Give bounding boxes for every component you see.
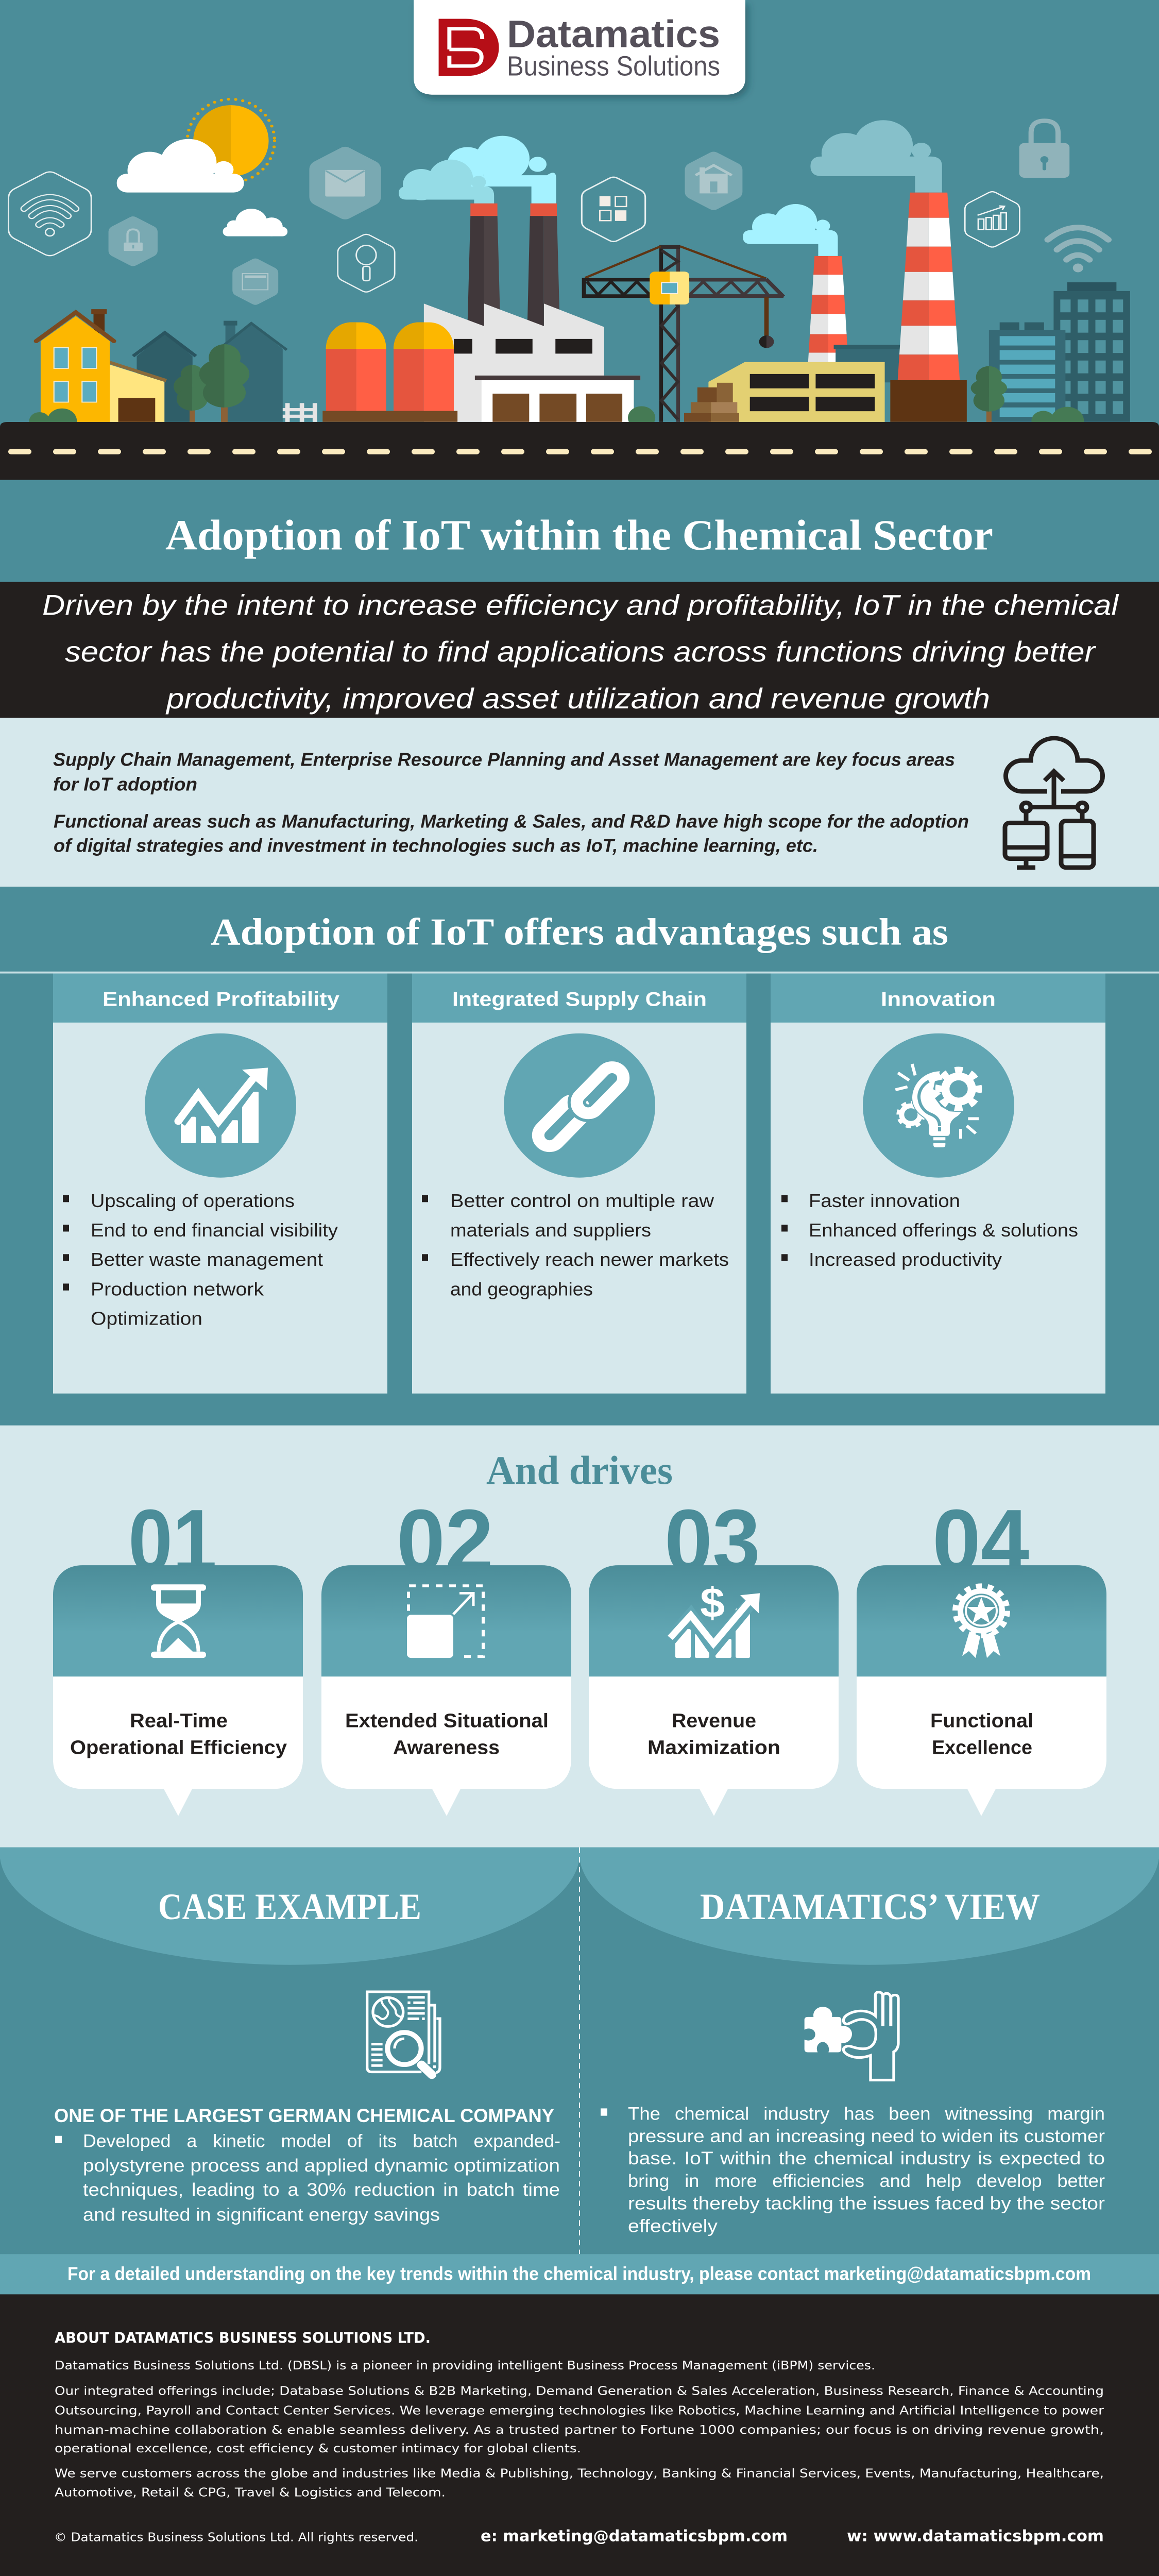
icon: growth chart [145, 1033, 296, 1178]
intro text: Driven by the intent to increase efficiency and profitability, IoT in the chemical [42, 590, 1119, 621]
numerals: 02 [397, 1490, 493, 1591]
yellow warehouse [708, 362, 885, 422]
card label [70, 1710, 287, 1759]
intro band [0, 582, 1159, 718]
bullet list: Better control on multiple raw [450, 1190, 714, 1211]
section heading: and drives: And drives [486, 1449, 673, 1493]
panel: integrated supply chain [412, 974, 746, 1394]
tower crane [584, 245, 783, 422]
card label [345, 1710, 549, 1759]
about text: Our integrated offerings include; Database Solutions & B2B Marketing, Demand Generation & Sales Acceleration, Business Research, Finance & Accounting [55, 2384, 1104, 2398]
chimneys: dark factory stacks [468, 216, 560, 326]
logo wordmark [507, 13, 720, 81]
front office building [989, 323, 1065, 422]
smoke: small striped chimney [743, 204, 838, 256]
numerals: 01 [128, 1490, 217, 1591]
icon: award rosette [957, 1587, 1006, 1658]
icon: revenue chart with dollar [670, 1579, 760, 1658]
intro text [42, 590, 1119, 715]
card label: Excellence [932, 1737, 1032, 1759]
icon: chain link [504, 1033, 655, 1178]
about text: Automotive, Retail & CPG, Travel & Logistics and Telecom. [55, 2485, 446, 2500]
card 03: revenue maximization [589, 1565, 839, 1816]
footer [0, 2294, 1159, 2576]
about text: Datamatics Business Solutions Ltd. (DBSL) is a pioneer in providing intelligent Business Process Management (iBPM) services. [55, 2359, 875, 2372]
logo card [414, 0, 745, 95]
case text: Developed a kinetic model of its batch expanded- [83, 2130, 560, 2151]
icon: expand square [407, 1586, 483, 1658]
icon: light bulb and gears [863, 1033, 1014, 1178]
about heading: ABOUT DATAMATICS BUSINESS SOLUTIONS LTD. [55, 2329, 431, 2346]
bullet list: Effectively reach newer markets [450, 1249, 729, 1270]
icon: house hexagon [685, 151, 742, 210]
icon: chart hexagon [965, 192, 1019, 247]
icon: window hexagon [232, 259, 278, 305]
card heading: Integrated Supply Chain [452, 988, 707, 1010]
view text [601, 2103, 1105, 2236]
about text: human-machine collaboration & enable seamless delivery. As a trusted partner to Fortune 1000 companies; our focus is on driving revenue growth, [55, 2422, 1104, 2437]
bullet list: Enhanced offerings & solutions [809, 1219, 1078, 1241]
card label: Awareness [393, 1737, 500, 1759]
card label: Real-Time [130, 1710, 228, 1732]
focus area text: Functional areas such as Manufacturing, Marketing & Sales, and R&D have high scope for the adoption [54, 811, 969, 832]
tree and bushes [628, 366, 1084, 435]
title: Adoption of IoT within the Chemical Sector [165, 511, 993, 559]
panel: datamatics view [601, 1886, 1105, 2236]
tall striped chimney [895, 193, 962, 380]
card 02: extended situational awareness [321, 1565, 571, 1816]
case text [55, 2130, 560, 2225]
view text: results thereby tackling the issues faced by the sector [628, 2193, 1105, 2213]
heading: case example: CASE EXAMPLE [158, 1886, 421, 1927]
icon: lock hexagon [109, 216, 158, 266]
icon: Datamatics DB mark [439, 19, 499, 76]
card label: Operational Efficiency [70, 1737, 287, 1759]
bullet list [422, 1190, 729, 1299]
card label: Revenue [672, 1710, 756, 1732]
bullet list: materials and suppliers [450, 1219, 651, 1241]
teal utility building [834, 345, 901, 382]
bullet list [63, 1190, 338, 1329]
case text: and resulted in significant energy savings [83, 2204, 440, 2225]
case text: polystyrene process and applied dynamic optimization [83, 2155, 560, 2176]
about text: Outsourcing, Payroll and Contact Center Services. We leverage emerging technologies like Robotics, Machine Learning and Artificial Intelligence to power [55, 2403, 1104, 2418]
numerals: 03 [664, 1490, 760, 1591]
focus area text: Supply Chain Management, Enterprise Resource Planning and Asset Management are key focus areas [53, 749, 955, 770]
bush [29, 409, 77, 433]
about text: We serve customers across the globe and industries like Media & Publishing, Technology, Banking & Financial Services, Events, Manufacturing, Healthcare, [55, 2466, 1104, 2480]
numerals [128, 1490, 1029, 1591]
view text: effectively [628, 2215, 718, 2236]
intro text: productivity, improved asset utilization and revenue growth [165, 683, 990, 715]
card heading: Enhanced Profitability [103, 988, 340, 1010]
card label: Extended Situational [345, 1710, 549, 1732]
bullet list: Better waste management [91, 1249, 323, 1270]
section heading: advantages: Adoption of IoT offers advantages such as [211, 911, 948, 953]
factory building [424, 303, 640, 422]
icon: hourglass [151, 1584, 206, 1658]
chimney caps [470, 204, 557, 216]
view text: bring in more efficiencies and help develop better [628, 2171, 1105, 2191]
icon: mail hexagon [309, 147, 381, 219]
teal background houses [133, 321, 287, 422]
contact website: w: www.datamaticsbpm.com [847, 2527, 1104, 2545]
bullet list: Optimization [91, 1308, 202, 1329]
copyright: © Datamatics Business Solutions Ltd. All rights reserved. [54, 2530, 418, 2544]
fence [283, 403, 317, 422]
numerals: 04 [932, 1490, 1029, 1591]
smoke: mid blue front cloud [399, 160, 494, 204]
focus area text: for IoT adoption [53, 773, 197, 794]
about text: operational excellence, cost efficiency & customer intimacy for global clients. [55, 2442, 581, 2455]
call to action band [0, 2254, 1159, 2294]
bullet list: Increased productivity [809, 1249, 1002, 1270]
icon: large wifi signal [1048, 228, 1109, 272]
small striped chimney [808, 256, 847, 362]
icon: revenue chart with dollar: $ [700, 1579, 725, 1626]
panel: enhanced profitability [53, 974, 387, 1394]
icon: report with magnifier [367, 1992, 440, 2075]
icon: large white cloud [117, 139, 244, 193]
focus area text: of digital strategies and investment in technologies such as IoT, machine learning, etc. [54, 835, 818, 856]
panel: innovation [771, 974, 1105, 1394]
bullet list: Faster innovation [809, 1190, 960, 1211]
bullet list: Production network [91, 1278, 264, 1299]
intro text: sector has the potential to find applications across functions driving better [65, 636, 1096, 668]
tall office building [1053, 282, 1130, 422]
icon: magnifier hexagon [338, 234, 395, 292]
logo wordmark: Business Solutions [507, 50, 720, 81]
case subheading: ONE OF THE LARGEST GERMAN CHEMICAL COMPANY [54, 2106, 554, 2127]
bullet list [781, 1190, 1078, 1270]
icon: apps hexagon [582, 177, 645, 242]
heading: datamatics view: DATAMATICS’ VIEW [700, 1886, 1040, 1927]
icon: wifi hexagon [9, 172, 91, 256]
icon: hand holding puzzle piece [805, 1992, 898, 2080]
logo wordmark: Datamatics [507, 13, 720, 56]
silos [322, 323, 457, 422]
icon: cloud connected devices [1005, 738, 1103, 868]
bullet list: and geographies [450, 1278, 593, 1299]
view text: The chemical industry has been witnessing margin [628, 2103, 1105, 2124]
case text: techniques, leading to a 30% reduction in batch time [83, 2179, 560, 2200]
focus area text [53, 749, 969, 856]
bullet list: End to end financial visibility [91, 1219, 338, 1241]
card label: Maximization [647, 1737, 780, 1759]
about text [55, 2359, 1104, 2500]
yellow house [36, 309, 166, 422]
card heading: Innovation [881, 988, 996, 1010]
smoke: pale blue rear cloud [447, 136, 556, 204]
bullet list: Upscaling of operations [91, 1190, 295, 1211]
card 04: functional excellence [857, 1565, 1106, 1816]
trees [174, 344, 249, 422]
icon: large padlock [1019, 121, 1069, 178]
brick pile [684, 383, 739, 422]
smoke: tall striped chimney [810, 120, 942, 193]
arc header band [0, 1848, 1159, 1965]
icon: sun [188, 99, 275, 182]
left half of skyline: sky icons, houses, silos and factory [9, 99, 640, 433]
road [0, 422, 1159, 480]
icon: small white cloud [223, 209, 287, 236]
panel: and drives [0, 1426, 1159, 1848]
panel: case example [54, 1886, 560, 2225]
card label [930, 1710, 1033, 1759]
view text: pressure and an increasing need to widen its customer [628, 2126, 1105, 2146]
chimney base [890, 380, 967, 422]
panel: key focus areas [0, 718, 1159, 887]
card label [647, 1710, 780, 1759]
contact email: e: marketing@datamaticsbpm.com [481, 2527, 788, 2545]
card label: Functional [930, 1710, 1033, 1732]
view text: base. IoT within the chemical industry is expected to [628, 2148, 1105, 2168]
card 01: real-time operational efficiency [53, 1565, 303, 1816]
hero illustration: industrial skyline [0, 99, 1159, 480]
right half of skyline: crane, chimneys, buildings and icons [582, 120, 1130, 435]
